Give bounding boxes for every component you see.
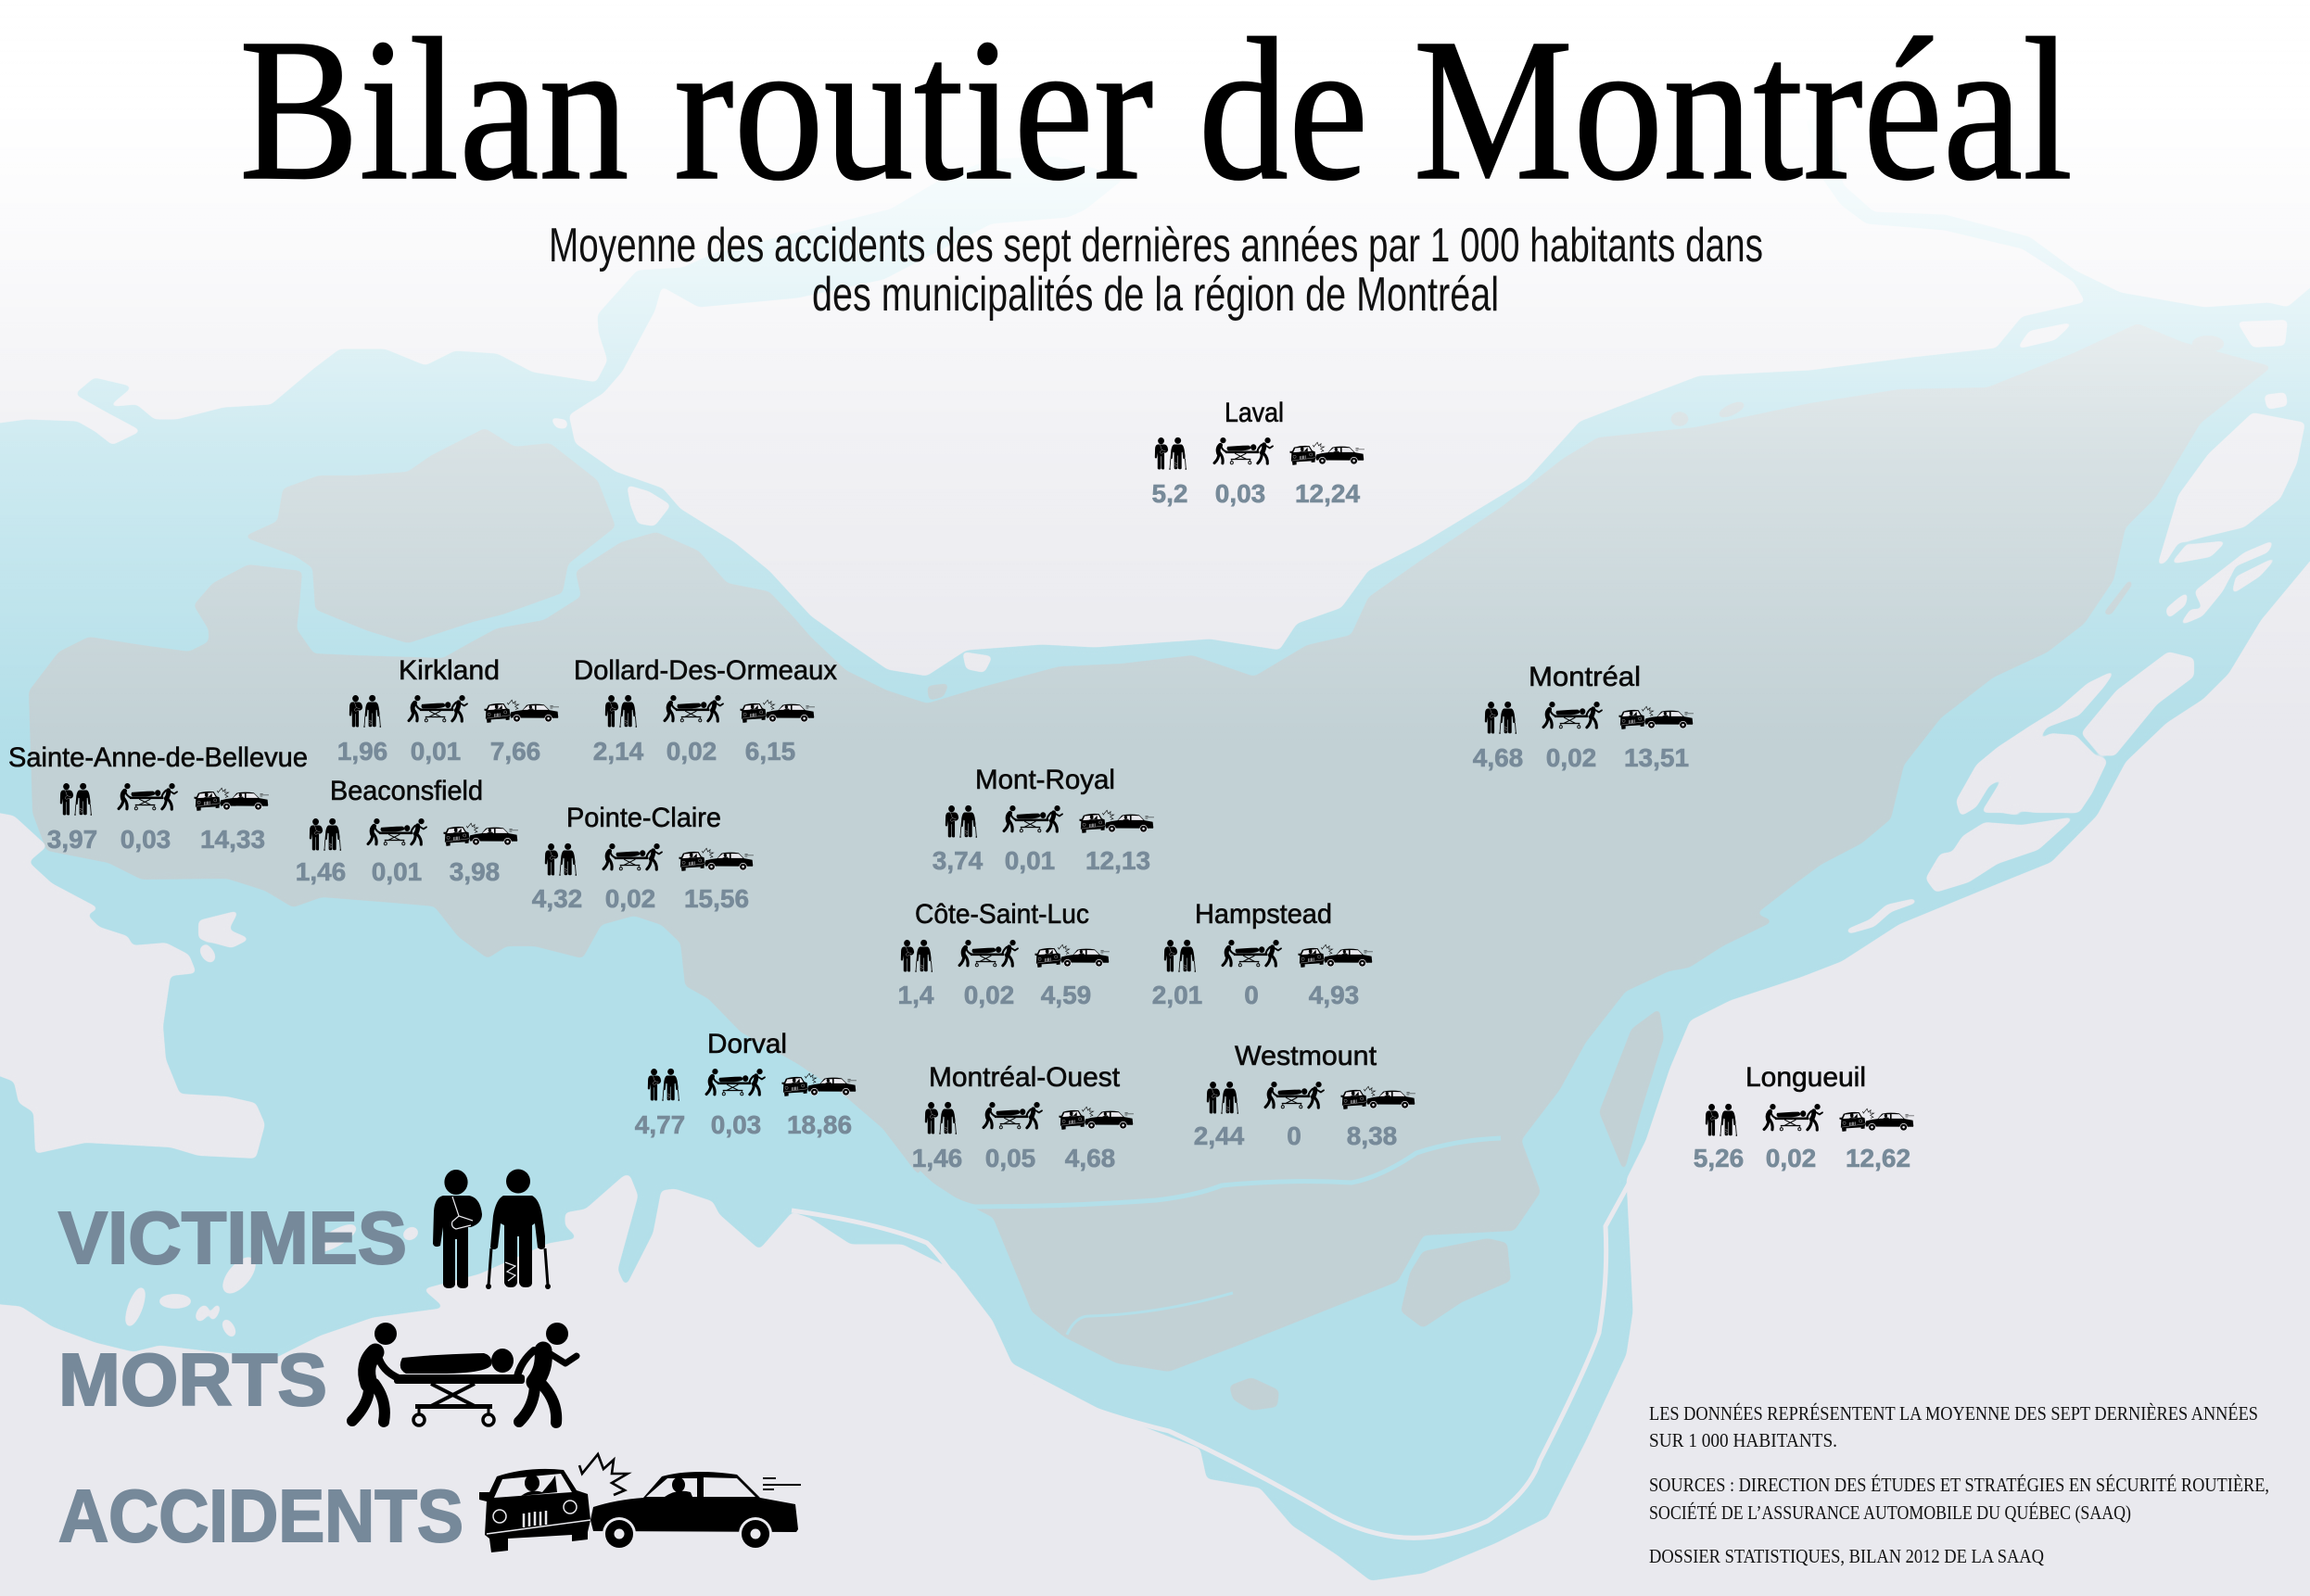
figures: Montréal-Ouest [912, 1144, 1115, 1172]
figures: Mont-Royal [933, 846, 1150, 875]
city: Laval [1152, 398, 1364, 508]
smaller grey islands [927, 336, 2225, 1411]
title: Bilan routier de Montréal [239, 0, 2073, 222]
figures: Côte-Saint-Luc: 1,4 [898, 981, 934, 1009]
legend label: morts: MORTS [58, 1338, 327, 1421]
figures: Montréal: 13,51 [1624, 743, 1689, 772]
subtitle: Moyenne des accidents des sept dernières années par 1 000 habitants dans [549, 219, 1763, 272]
subtitle [549, 219, 1763, 322]
icons: Dorval [648, 1069, 857, 1101]
city: Montréal-Ouest [912, 1062, 1134, 1172]
figures: Longueuil: 5,26 [1694, 1144, 1744, 1172]
icons: Montréal-Ouest [925, 1102, 1134, 1134]
figures: Hampstead [1152, 981, 1359, 1009]
figures: Kirkland [337, 737, 540, 766]
name: Pointe-Claire: Pointe-Claire [566, 803, 721, 833]
figures: Pointe-Claire: 0,02 [605, 884, 655, 913]
icon: car crash [479, 1454, 801, 1552]
figures: Kirkland: 7,66 [490, 737, 540, 766]
notes and sources: SUR 1 000 HABITANTS. [1649, 1429, 1837, 1451]
figures: Sainte-Anne-de-Bellevue: 0,03 [121, 825, 171, 854]
figures: Westmount: 2,44 [1194, 1121, 1245, 1150]
legend [58, 1170, 801, 1557]
figures: Montréal [1473, 743, 1689, 772]
icons: Kirkland [349, 695, 559, 728]
figures: Dollard-Des-Ormeaux: 0,02 [666, 737, 717, 766]
figures: Pointe-Claire: 4,32 [532, 884, 582, 913]
figures: Westmount: 0 [1287, 1121, 1301, 1150]
figures: Beaconsfield [296, 857, 500, 886]
seaway canal [792, 1179, 1631, 1538]
notes and sources [1649, 1402, 2269, 1567]
icons: Montréal [1485, 702, 1694, 734]
name: Westmount: Westmount [1235, 1041, 1377, 1071]
island: Île Bizard [246, 429, 615, 642]
city: Dorval [635, 1029, 857, 1139]
figures: Westmount [1194, 1121, 1397, 1150]
city: Sainte-Anne-de-Bellevue [8, 742, 308, 854]
figures: Sainte-Anne-de-Bellevue: 3,97 [47, 825, 97, 854]
figures: Mont-Royal: 0,01 [1005, 846, 1055, 875]
figures: Côte-Saint-Luc [898, 981, 1091, 1009]
icon: injured people [433, 1170, 551, 1289]
figures: Dorval: 0,03 [711, 1110, 761, 1139]
name: Hampstead: Hampstead [1195, 899, 1332, 930]
figures: Montréal: 4,68 [1473, 743, 1523, 772]
figures: Sainte-Anne-de-Bellevue [47, 825, 265, 854]
figures: Longueuil [1694, 1144, 1910, 1172]
figures: Pointe-Claire: 15,56 [684, 884, 749, 913]
icon: stretcher [352, 1323, 577, 1425]
figures: Laval: 0,03 [1215, 479, 1265, 508]
icons: Hampstead [1164, 940, 1373, 972]
figures: Longueuil: 0,02 [1766, 1144, 1816, 1172]
name: Montréal-Ouest: Montréal-Ouest [929, 1062, 1121, 1093]
name: Dollard-Des-Ormeaux: Dollard-Des-Ormeaux [574, 655, 837, 686]
icons: Longueuil [1706, 1104, 1914, 1136]
name: Longueuil: Longueuil [1745, 1062, 1866, 1093]
figures: Laval: 5,2 [1152, 479, 1187, 508]
figures: Dorval [635, 1110, 852, 1139]
figures: Hampstead: 4,93 [1309, 981, 1359, 1009]
name: Dorval: Dorval [707, 1029, 787, 1059]
icons: Dollard-Des-Ormeaux [605, 695, 815, 728]
figures: Laval [1152, 479, 1360, 508]
figures: Longueuil: 12,62 [1846, 1144, 1910, 1172]
city: Longueuil [1694, 1062, 1914, 1172]
figures: Côte-Saint-Luc: 4,59 [1041, 981, 1091, 1009]
notes and sources: SOCIÉTÉ DE L’ASSURANCE AUTOMOBILE DU QUÉBEC (SAAQ) [1649, 1501, 2131, 1524]
figures: Laval: 12,24 [1295, 479, 1360, 508]
figures: Mont-Royal: 3,74 [933, 846, 984, 875]
icons: Côte-Saint-Luc [901, 940, 1110, 972]
figures: Mont-Royal: 12,13 [1085, 846, 1150, 875]
city: Côte-Saint-Luc [898, 899, 1110, 1009]
figures: Dollard-Des-Ormeaux: 6,15 [745, 737, 795, 766]
city: Hampstead [1152, 899, 1373, 1009]
icons: Beaconsfield [310, 818, 518, 851]
land patches and islands in the rivers [0, 320, 2305, 1340]
figures: Beaconsfield: 0,01 [372, 857, 422, 886]
name: Côte-Saint-Luc: Côte-Saint-Luc [915, 899, 1089, 930]
figures: Dollard-Des-Ormeaux [593, 737, 795, 766]
white fade over the top of the map [0, 0, 2310, 741]
legend label: accidents: ACCIDENTS [58, 1475, 463, 1557]
figures: Montréal-Ouest: 4,68 [1065, 1144, 1115, 1172]
figures: Hampstead: 2,01 [1152, 981, 1202, 1009]
figures: Dorval: 4,77 [635, 1110, 685, 1139]
city: Dollard-Des-Ormeaux [574, 655, 837, 766]
name: Sainte-Anne-de-Bellevue: Sainte-Anne-de-Bellevue [8, 742, 308, 773]
figures: Sainte-Anne-de-Bellevue: 14,33 [200, 825, 265, 854]
figures: Dorval: 18,86 [787, 1110, 852, 1139]
icons: Westmount [1207, 1082, 1415, 1114]
city: Westmount [1194, 1041, 1415, 1150]
legend label: victimes: VICTIMES [58, 1197, 407, 1279]
figures: Beaconsfield: 3,98 [450, 857, 500, 886]
figures: Kirkland: 0,01 [411, 737, 461, 766]
inner canal on the island [919, 1138, 1501, 1207]
icons: Pointe-Claire [545, 843, 754, 876]
notes and sources: DOSSIER STATISTIQUES, BILAN 2012 DE LA SAAQ [1649, 1545, 2044, 1567]
name: Mont-Royal: Mont-Royal [975, 765, 1115, 795]
name: Montréal: Montréal [1529, 662, 1641, 692]
figures: Montréal-Ouest: 1,46 [912, 1144, 962, 1172]
figures: Montréal: 0,02 [1546, 743, 1596, 772]
figures: Hampstead: 0 [1244, 981, 1259, 1009]
icons: Laval [1155, 437, 1364, 470]
city: Mont-Royal [933, 765, 1154, 875]
city: Montréal [1473, 662, 1694, 772]
name: Laval: Laval [1225, 398, 1284, 428]
city: Pointe-Claire [532, 803, 754, 913]
figures: Côte-Saint-Luc: 0,02 [964, 981, 1014, 1009]
figures: Beaconsfield: 1,46 [296, 857, 346, 886]
name: Beaconsfield: Beaconsfield [330, 776, 483, 806]
island of Montréal [30, 324, 2270, 1371]
subtitle: des municipalités de la région de Montréal [812, 268, 1499, 322]
icons: Sainte-Anne-de-Bellevue [60, 783, 269, 816]
name: Kirkland: Kirkland [399, 655, 500, 686]
city: Beaconsfield [296, 776, 518, 886]
icons: Mont-Royal [946, 805, 1154, 838]
figures: Montréal-Ouest: 0,05 [985, 1144, 1035, 1172]
figures: Pointe-Claire [532, 884, 749, 913]
figures: Dollard-Des-Ormeaux: 2,14 [593, 737, 644, 766]
figures: Westmount: 8,38 [1347, 1121, 1397, 1150]
city: Kirkland [337, 655, 559, 766]
figures: Kirkland: 1,96 [337, 737, 387, 766]
